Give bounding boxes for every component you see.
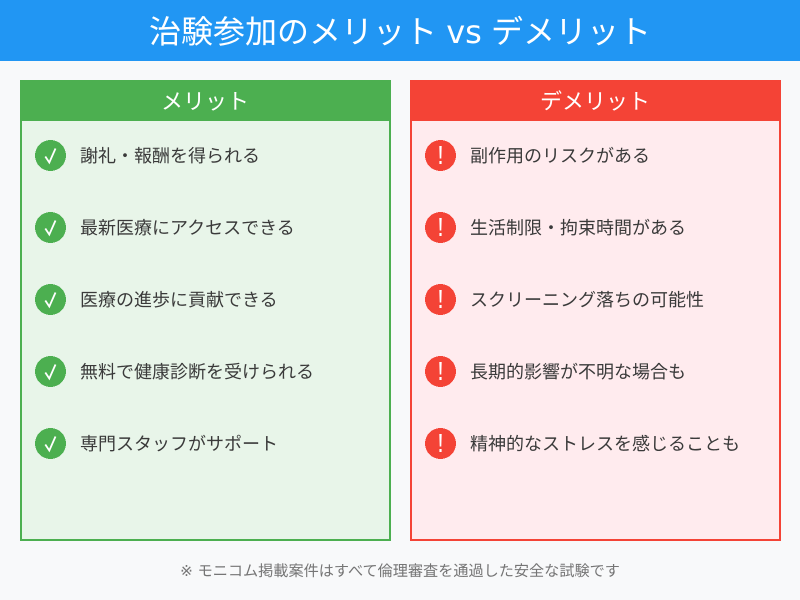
demerit item 3: スクリーニング落ちの可能性 [470, 290, 704, 311]
demerit item 3 [425, 284, 704, 315]
merits heading: メリット [161, 90, 249, 115]
title banner [0, 0, 800, 61]
merit item 4: 無料で健康診断を受けられる [80, 362, 314, 383]
merit item 5: 専門スタッフがサポート [80, 434, 278, 455]
demerit item 1 [425, 140, 650, 171]
demerit item 2: 生活制限・拘束時間がある [470, 218, 686, 239]
merit item 3 [35, 284, 278, 315]
merit item 5 [35, 428, 278, 459]
merit item 1: 謝礼・報酬を得られる [80, 146, 260, 167]
demerit item 5 [425, 428, 740, 459]
demerit item 1: 副作用のリスクがある [470, 146, 650, 167]
panel: merits [20, 80, 391, 540]
demerit item 5: 精神的なストレスを感じることも [470, 434, 740, 455]
merit item 3: 医療の進歩に貢献できる [80, 290, 278, 311]
demerit item 4 [425, 356, 686, 387]
demerit item 4: 長期的影響が不明な場合も [470, 362, 686, 383]
merit item 4 [35, 356, 314, 387]
merit item 1 [35, 140, 260, 171]
merit item 2: 最新医療にアクセスできる [80, 218, 295, 239]
demerit item 2 [425, 212, 686, 243]
panel: demerits [410, 80, 781, 540]
merit item 2 [35, 212, 295, 243]
footnote: ※ モニコム掲載案件はすべて倫理審査を通過した安全な試験です [180, 562, 620, 580]
demerits heading: デメリット [540, 90, 650, 115]
title banner: 治験参加のメリット vs デメリット [149, 13, 651, 51]
